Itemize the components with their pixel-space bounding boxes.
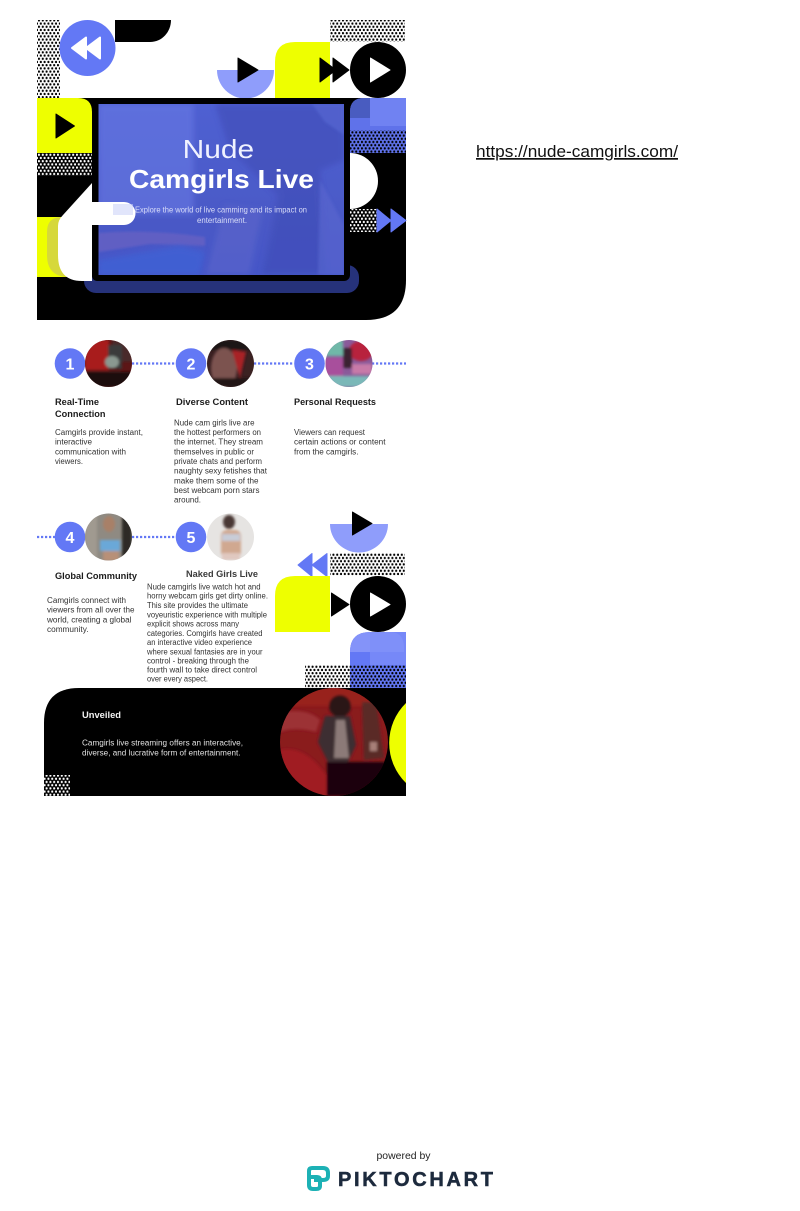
top decorative shapes [37, 20, 406, 98]
body: step 5: explicit shows across many [147, 620, 239, 629]
icon: black play [352, 512, 372, 535]
body: step 5: horny webcam girls get dirty online. [147, 592, 268, 601]
step 1 badge [55, 348, 85, 379]
step 1 badge: 1 [66, 356, 75, 374]
light blue tile [350, 632, 406, 688]
heading: Real-Time Connection: Connection [55, 409, 106, 420]
icon: black play [238, 58, 258, 82]
closing body: Camgirls live streaming offers an interactive, [82, 739, 243, 748]
body: step 1: communication with [55, 447, 126, 456]
screen image [98, 104, 344, 275]
white half disc [350, 153, 378, 209]
icon: black play circle [350, 576, 406, 632]
icon: blue fast forward [377, 209, 406, 232]
laptop frame [92, 98, 350, 281]
dotted connectors [132, 362, 406, 365]
step 5 badge [176, 522, 206, 552]
powered by: powered by [376, 1150, 431, 1162]
body: step 5: categories. Comgirls have created [147, 629, 262, 638]
body: step 1: Camgirls provide instant, [55, 428, 143, 437]
body: step 3: from the camgirls. [294, 447, 358, 456]
periwinkle half circle [330, 524, 388, 552]
white dot band left [37, 153, 92, 176]
body: step 2 [174, 418, 268, 504]
step 5 photo [207, 513, 254, 561]
heading: Personal Requests: Personal Requests [294, 397, 376, 408]
heading: Naked Girls Live: Naked Girls Live [186, 569, 258, 580]
body: step 3: certain actions or content [294, 438, 386, 447]
timeline row 1 [55, 340, 406, 388]
dot band [330, 553, 405, 576]
yellow circle [389, 703, 406, 783]
closing panel [44, 688, 406, 796]
step 2 photo [207, 340, 254, 388]
step 5 badge: 5 [187, 530, 196, 547]
icon: play on yellow [56, 114, 74, 138]
yellow play tile [37, 98, 92, 153]
step text row 2 [46, 569, 268, 683]
heading: Global Community: Global Community [55, 571, 138, 582]
step 2 badge [176, 348, 206, 379]
body: step 4: Camgirls connect with [47, 596, 126, 605]
body: step 3: Viewers can request [294, 428, 366, 437]
step text row 1 [55, 397, 386, 504]
body: step 5: voyeuristic experience with multiple [147, 610, 268, 619]
icon: blue rewind [298, 554, 327, 576]
link: https://nude-camgirls.com/ [476, 142, 678, 161]
body: step 2: best webcam porn stars [174, 486, 260, 495]
icon: rewind circle [60, 20, 116, 76]
body: step 2: Nude cam girls live are [174, 418, 255, 427]
hero panel [37, 98, 406, 320]
black quarter tab [115, 20, 171, 42]
icon: black play circle [350, 42, 406, 98]
body: step 5: over every aspect. [147, 674, 208, 683]
body: step 2: make them some of the [174, 476, 259, 485]
body: step 5 [146, 582, 268, 683]
closing photo [280, 688, 388, 796]
step 4 badge [55, 522, 85, 552]
olive overlap shape [47, 217, 92, 277]
icon: black play [332, 593, 349, 616]
mid right decorative shapes [275, 512, 406, 688]
hero title: Nude [183, 134, 254, 164]
body: step 5: This site provides the ultimate [147, 601, 249, 610]
dot column top left [37, 20, 60, 98]
step 3 badge: 3 [305, 356, 314, 374]
body: step 2: naughty sexy fetishes that [174, 467, 268, 476]
body: step 5: fourth wall to take direct control [147, 665, 257, 674]
body: step 4: world, creating a global [46, 615, 132, 624]
body: step 2: around. [174, 495, 201, 504]
dot band over blue tile [350, 130, 406, 153]
screen image: Camgirls Live [129, 164, 314, 194]
yellow tile lower left [37, 217, 92, 277]
closing heading: Unveiled [82, 710, 121, 721]
body: step 2: the hottest performers on [174, 428, 261, 437]
heading: Real-Time Connection: Real-Time [55, 397, 99, 408]
hero subtitle: Explore the world of live camming and its impact on [135, 206, 307, 214]
body: step 1: viewers. [55, 457, 83, 466]
wordmark: PIKTOCHART [338, 1169, 493, 1191]
yellow tile [275, 42, 330, 98]
body: step 5: where sexual fantasies are in your [146, 647, 263, 656]
body: step 1 [55, 428, 143, 466]
white arrow shape [58, 183, 136, 281]
dots over blue tile [350, 665, 406, 688]
dots on white [305, 665, 350, 688]
body: step 5: Nude camgirls live watch hot and [147, 582, 260, 591]
dotted connectors [37, 536, 176, 538]
laptop base shadow [84, 265, 359, 293]
heading: Real-Time Connection [55, 397, 106, 420]
body: step 4: community. [47, 625, 88, 634]
icon: piktochart logo [309, 1168, 328, 1189]
footer: powered by Piktochart [309, 1150, 493, 1191]
step 2 badge: 2 [187, 356, 196, 374]
body: step 2: private chats and perform [174, 457, 262, 466]
body: step 2: the internet. They stream [174, 438, 263, 447]
body: step 4 [46, 596, 135, 634]
step 4 badge: 4 [66, 530, 75, 547]
icon: black fast forward [320, 58, 349, 82]
white dot patch [44, 775, 70, 796]
body: step 4: viewers from all over the [47, 606, 135, 615]
step 4 photo [85, 513, 132, 561]
hero black background [37, 98, 406, 320]
body: step 5: control - breaking through the [147, 656, 250, 665]
closing body: diverse, and lucrative form of entertainment. [82, 748, 240, 757]
body: step 5: an interactive video experience [147, 638, 253, 647]
body: step 2: themselves in public or [174, 447, 254, 456]
step 1 photo [85, 340, 132, 387]
step 3 badge [294, 348, 325, 379]
step 3 photo [325, 340, 373, 387]
screen image: entertainment. [197, 216, 247, 225]
timeline row 2 [37, 513, 254, 561]
body: step 1: interactive [55, 438, 93, 447]
black panel [44, 688, 406, 796]
dot band top right [330, 20, 405, 42]
closing body [82, 739, 243, 757]
light blue tile [350, 98, 406, 153]
yellow tile [275, 576, 330, 632]
frame edge over arrow [92, 225, 344, 281]
periwinkle half circle [217, 70, 274, 98]
body: step 3 [294, 428, 386, 456]
heading: Diverse Content: Diverse Content [176, 397, 249, 408]
white dot band right [350, 209, 378, 232]
